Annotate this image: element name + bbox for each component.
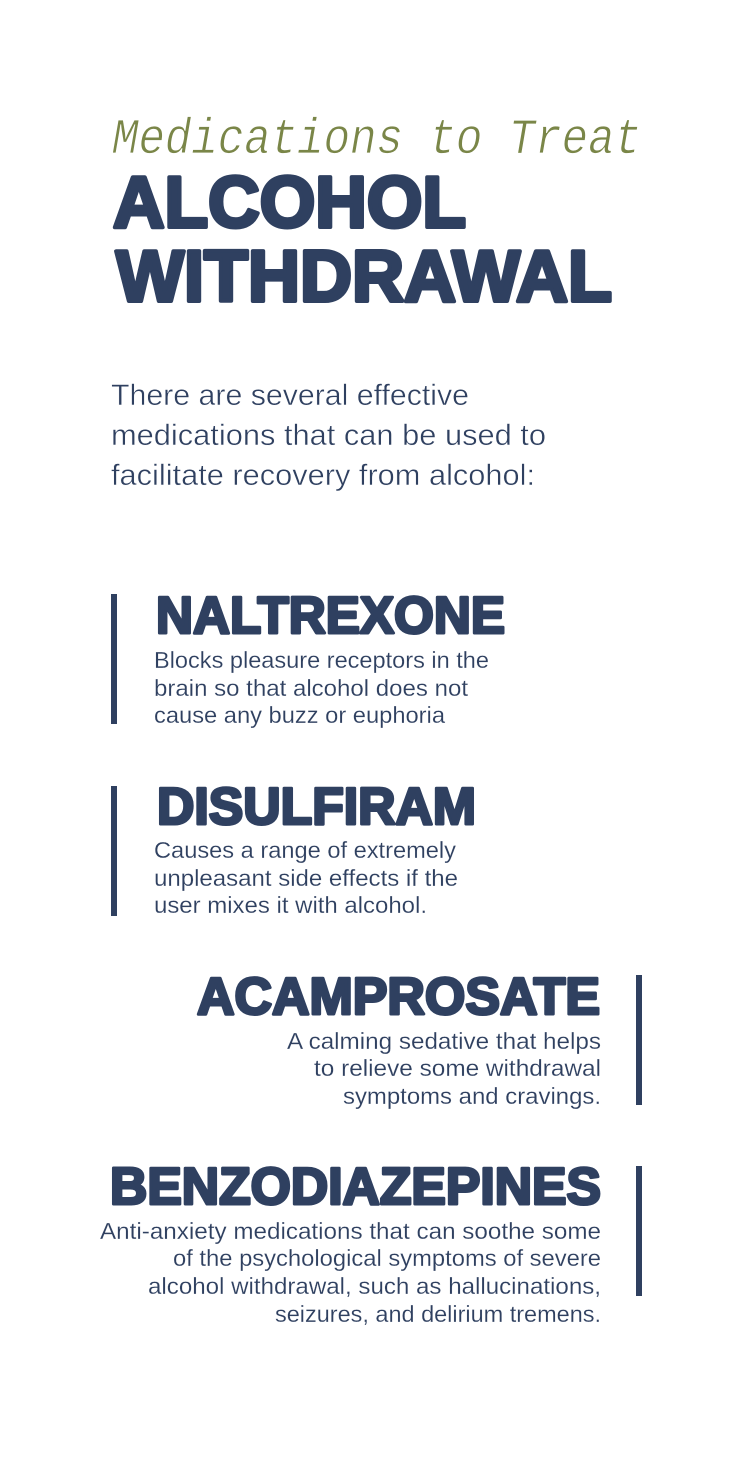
description: symptoms and cravings.	[343, 1083, 601, 1109]
description	[287, 1028, 601, 1109]
accent bar	[636, 975, 642, 1105]
description: Blocks pleasure receptors in the	[154, 647, 489, 673]
panel: benzodiazepines	[100, 1158, 642, 1327]
description: Anti-anxiety medications that can soothe some	[100, 1218, 601, 1244]
heading line: alcohol: ALCOHOL	[113, 163, 466, 243]
description: Causes a range of extremely	[154, 837, 457, 863]
description: user mixes it with alcohol.	[154, 892, 427, 918]
accent bar	[636, 1166, 642, 1296]
description: A calming sedative that helps	[287, 1028, 601, 1054]
description	[100, 1218, 601, 1327]
title	[112, 112, 641, 317]
heading line: withdrawal: WITHDRAWAL	[116, 237, 612, 317]
description: unpleasant side effects if the	[154, 865, 458, 891]
panel: disulfiram	[111, 778, 476, 918]
description: of the psychological symptoms of severe	[173, 1245, 601, 1271]
drug name: NALTREXONE	[156, 587, 505, 645]
drug name: BENZODIAZEPINES	[110, 1158, 601, 1216]
intro text: facilitate recovery from alcohol:	[111, 459, 535, 492]
description: cause any buzz or euphoria	[154, 702, 445, 728]
intro text: There are several effective	[111, 379, 469, 412]
accent bar	[111, 786, 117, 916]
intro text: medications that can be used to	[111, 419, 546, 452]
drug name: ACAMPROSATE	[197, 968, 600, 1026]
accent bar	[111, 594, 117, 724]
panel: naltrexone	[111, 587, 505, 728]
description: seizures, and delirium tremens.	[275, 1301, 601, 1327]
panel: acamprosate	[197, 968, 642, 1109]
intro text	[111, 379, 546, 492]
subtitle: Medications to Treat	[112, 112, 641, 169]
drug name: DISULFIRAM	[157, 778, 476, 836]
description	[154, 647, 489, 728]
description: alcohol withdrawal, such as hallucinations,	[148, 1273, 601, 1299]
description: brain so that alcohol does not	[154, 675, 469, 701]
description: to relieve some withdrawal	[314, 1055, 601, 1081]
description	[154, 837, 458, 918]
